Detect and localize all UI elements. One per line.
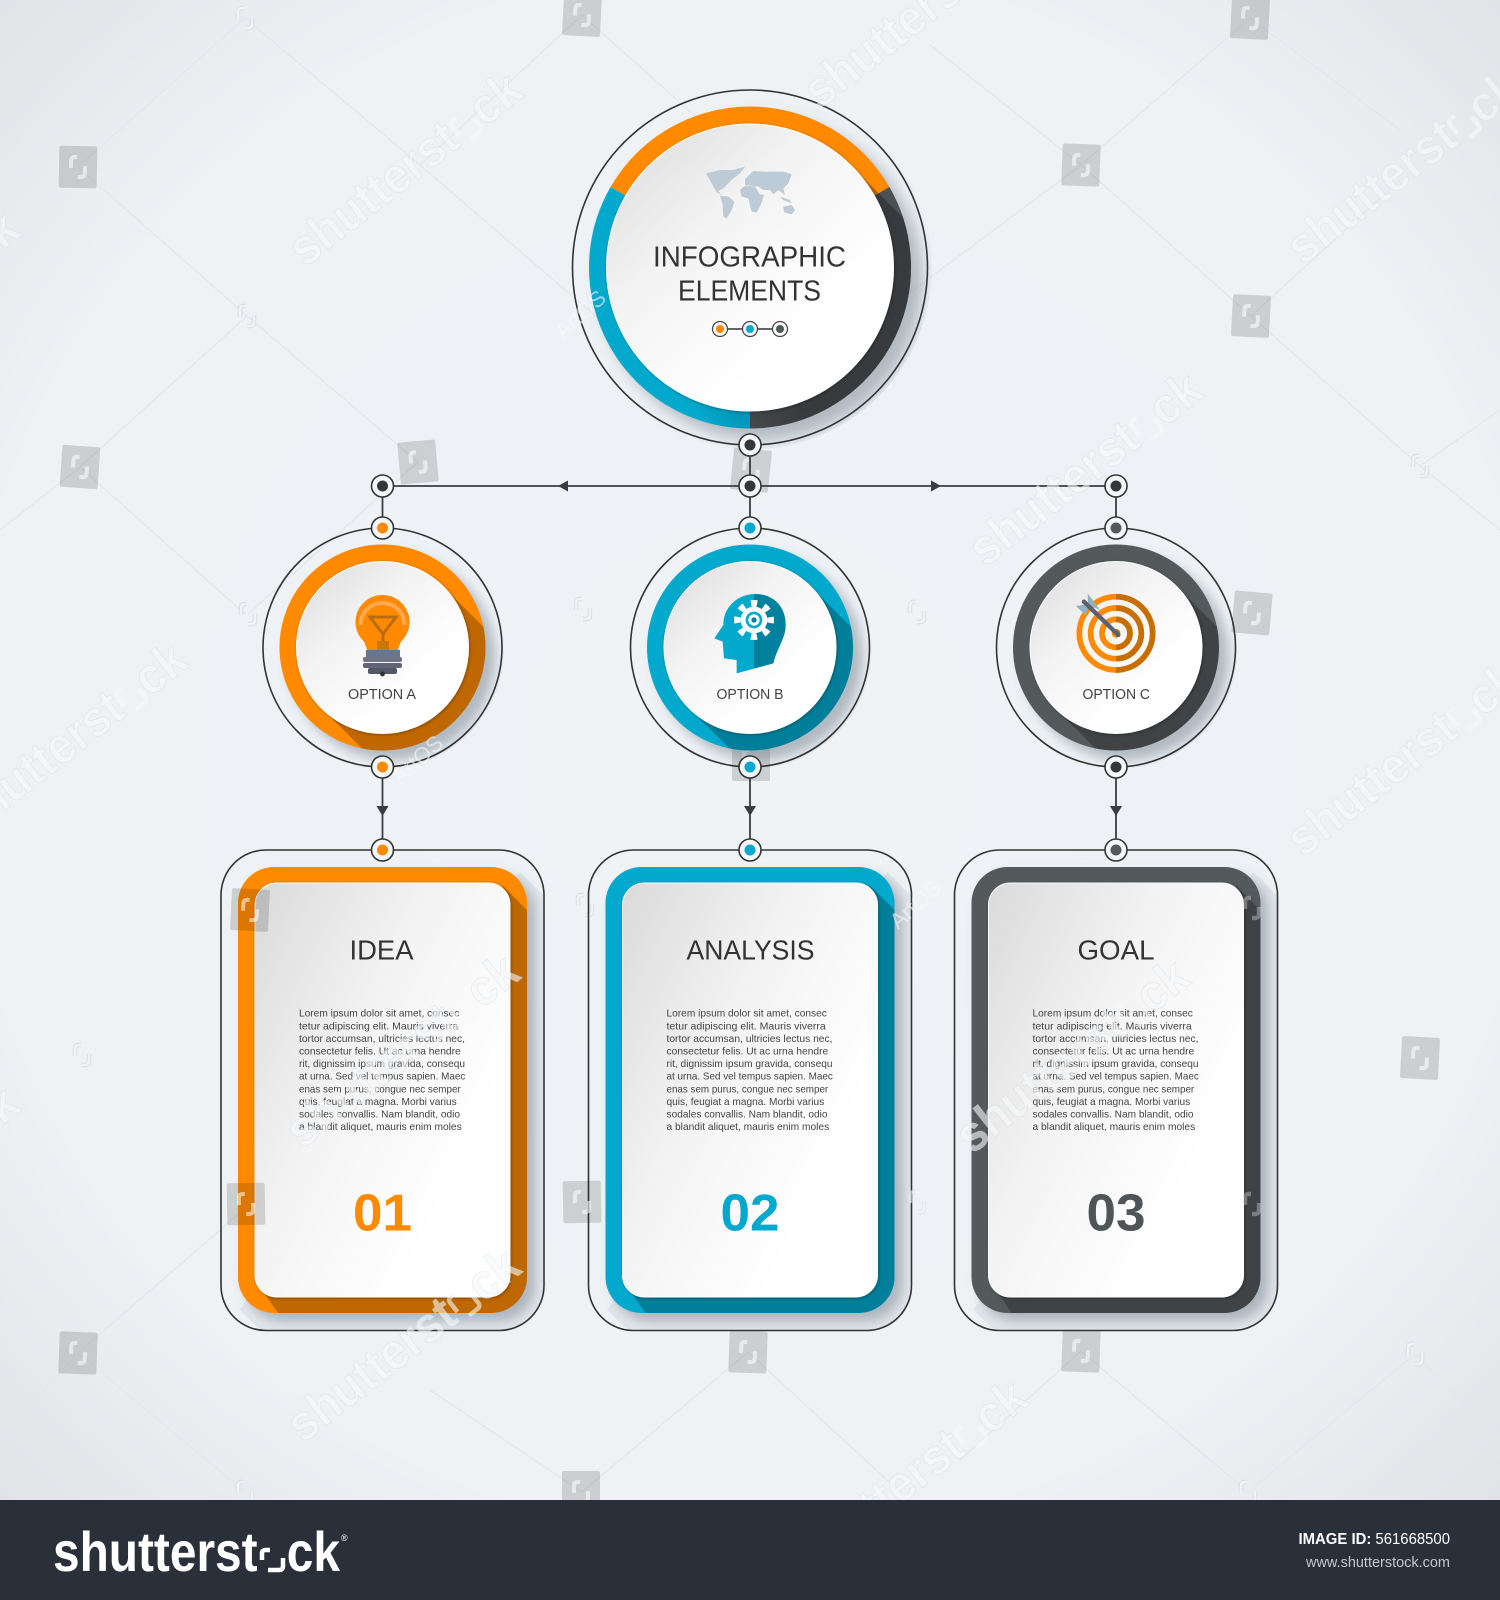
card paragraph: enas sem purus, congue nec semper (666, 1083, 829, 1095)
footer bar (0, 1500, 1500, 1600)
card paragraph: rit, dignissim ipsum gravida, consequ (1032, 1058, 1199, 1070)
ring segment blue (598, 191, 750, 420)
card paragraph: Lorem ipsum dolor sit amet, consec (666, 1008, 827, 1020)
title: ELEMENTS (678, 276, 821, 308)
card title: GOAL (1078, 934, 1154, 965)
watermark: contributor tags: ArtOS (885, 875, 946, 934)
footer image id: IMAGE ID: 561668500 (1298, 1531, 1450, 1548)
card number: 03 (1086, 1185, 1146, 1243)
icon: world map (706, 167, 795, 218)
card title: ANALYSIS (686, 934, 814, 965)
card paragraph: rit, dignissim ipsum gravida, consequ (666, 1058, 833, 1070)
card paragraph: consectetur felis. Ut ac urna hendre (1032, 1046, 1194, 1058)
watermark wordmarks: shutterstock (944, 947, 1200, 1164)
panel: option B circle (630, 528, 870, 768)
icon: head with gear (714, 594, 786, 673)
card paragraph: tortor accumsan, ultricies lectus nec, (666, 1033, 832, 1045)
card paragraph (299, 1008, 465, 1133)
card paragraph: a blandit aliquet, mauris enim moles (299, 1121, 462, 1133)
card paragraph: sodales convallis. Nam blandit, odio (299, 1108, 460, 1120)
footer registered mark: ® (341, 1533, 348, 1543)
label: option A: OPTION A (348, 687, 416, 703)
card paragraph: sodales convallis. Nam blandit, odio (1032, 1108, 1194, 1120)
card paragraph: tortor accumsan, ultricies lectus nec, (1032, 1033, 1198, 1045)
card paragraph: tortor accumsan, ultricies lectus nec, (299, 1033, 465, 1045)
watermark: contributor tags: ArtOS (387, 730, 448, 789)
main circle (572, 89, 932, 448)
watermark wordmarks: shutterstock (274, 942, 530, 1159)
card paragraph: at urna. Sed vel tempus sapien. Maec (299, 1071, 465, 1083)
card paragraph: tetur adipiscing elit. Mauris viverra (666, 1020, 826, 1032)
card paragraph: quis, feugiat a magna. Morbi varius (299, 1096, 457, 1108)
watermark wordmarks: shutterstock (957, 360, 1213, 577)
footer logo wordmark: shutterstock (53, 1520, 341, 1583)
ring segment orange (618, 115, 882, 191)
label: option B: OPTION B (716, 687, 784, 703)
panel: card 01 IDEA (220, 849, 545, 1332)
icon: light bulb (356, 595, 410, 676)
card paragraph: a blandit aliquet, mauris enim moles (666, 1121, 829, 1133)
watermark: contributor tags (387, 285, 946, 934)
card paragraph: enas sem purus, congue nec semper (1032, 1083, 1195, 1095)
label: option C: OPTION C (1082, 687, 1150, 703)
arrow: left (558, 480, 568, 492)
panel: card 02 ANALYSIS (588, 849, 912, 1332)
ring segment dark (750, 191, 902, 420)
panel: card 03 GOAL (954, 849, 1278, 1332)
watermark wordmarks: shutterstock (277, 60, 533, 277)
panel: option A circle (262, 528, 503, 768)
card paragraph: tetur adipiscing elit. Mauris viverra (299, 1020, 458, 1032)
watermark marks over the cards (227, 888, 1259, 1225)
card paragraph: Lorem ipsum dolor sit amet, consec (1032, 1008, 1193, 1020)
connector nodes (372, 434, 1127, 861)
card paragraph (1032, 1008, 1199, 1133)
card paragraph: sodales convallis. Nam blandit, odio (666, 1108, 828, 1120)
card paragraph: consectetur felis. Ut ac urna hendre (299, 1046, 461, 1058)
title (653, 242, 846, 308)
arrow: down A (376, 806, 388, 816)
card paragraph: rit, dignissim ipsum gravida, consequ (299, 1058, 465, 1070)
footer logo glyph (262, 1550, 283, 1570)
card paragraph: a blandit aliquet, mauris enim moles (1032, 1121, 1195, 1133)
footer url: www.shutterstock.com (1305, 1555, 1450, 1571)
card paragraph: consectetur felis. Ut ac urna hendre (666, 1046, 828, 1058)
card paragraph: Lorem ipsum dolor sit amet, consec (299, 1008, 459, 1020)
card paragraph: tetur adipiscing elit. Mauris viverra (1032, 1020, 1192, 1032)
arrow: right (931, 480, 941, 492)
watermark wordmarks: shutterstock (782, 1368, 1038, 1585)
panel: option C circle (996, 528, 1236, 768)
mini three-dot timeline (712, 322, 788, 336)
card paragraph (666, 1008, 833, 1133)
card paragraph: quis, feugiat a magna. Morbi varius (1032, 1096, 1190, 1108)
card paragraph: at urna. Sed vel tempus sapien. Maec (666, 1071, 833, 1083)
card title: IDEA (350, 934, 414, 965)
card paragraph: enas sem purus, congue nec semper (299, 1083, 461, 1095)
arrow: down C (1110, 806, 1122, 816)
connector lines (382, 445, 1116, 850)
card paragraph: quis, feugiat a magna. Morbi varius (666, 1096, 824, 1108)
icon: target with dart (1076, 593, 1153, 670)
watermark: contributor tags: ArtOS (550, 285, 611, 344)
title: INFOGRAPHIC (653, 242, 846, 274)
watermark wordmarks: shutterstock (275, 1236, 531, 1453)
card number: 02 (720, 1185, 780, 1243)
card paragraph: at urna. Sed vel tempus sapien. Maec (1032, 1071, 1199, 1083)
arrow: down B (744, 806, 756, 816)
card number: 01 (353, 1185, 412, 1243)
